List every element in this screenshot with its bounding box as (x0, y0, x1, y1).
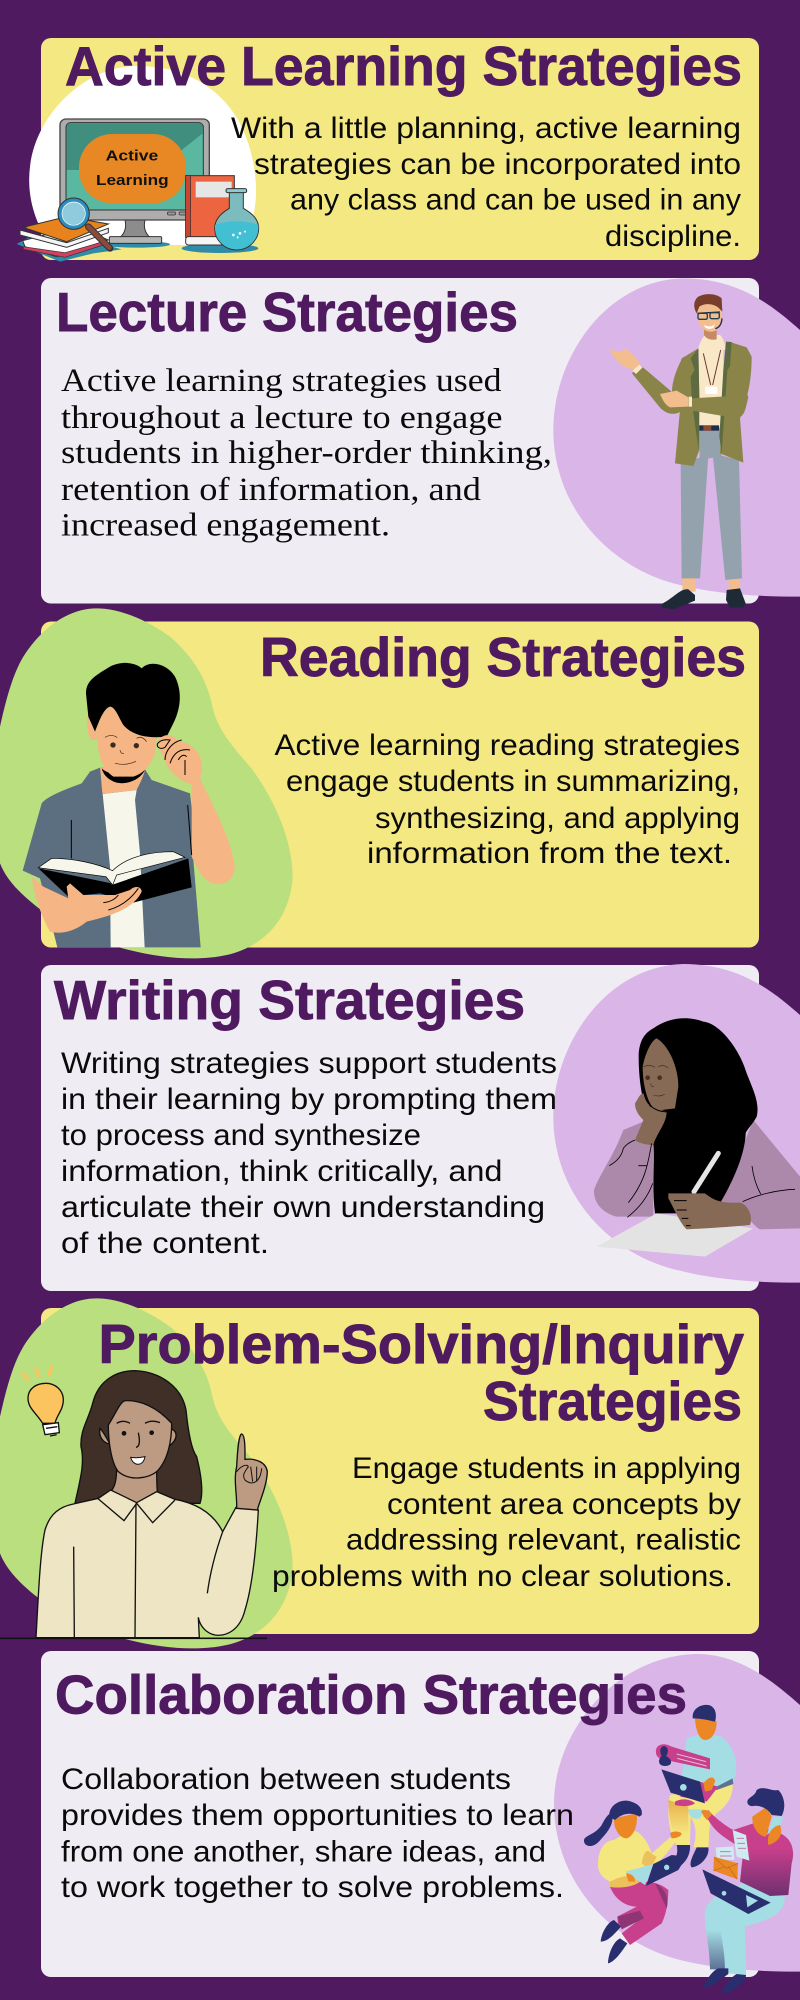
body text: of the content. (61, 1227, 269, 1260)
body text: to process and synthesize (61, 1119, 421, 1152)
body text: provides them opportunities to learn (61, 1799, 574, 1832)
panel: lecture strategies (41, 278, 800, 609)
body text: engage students in summarizing, (286, 765, 740, 798)
body text (61, 1047, 557, 1260)
body text: Active learning reading strategies (274, 729, 740, 762)
illustration: lecturer on purple blob (553, 278, 800, 609)
illustration: woman with idea on green blob (0, 1298, 293, 1648)
heading: Lecture Strategies (56, 281, 518, 343)
body text: content area concepts by (387, 1488, 741, 1521)
body text: synthesizing, and applying (375, 802, 740, 835)
heading (98, 1313, 744, 1432)
illustration: student reading on green blob (0, 608, 293, 958)
body text: information, think critically, and (61, 1155, 503, 1188)
body text: articulate their own understanding (61, 1191, 545, 1224)
desk line (0, 1638, 267, 1639)
body text: to work together to solve problems. (61, 1871, 564, 1904)
panel: problem-solving inquiry strategies (0, 1298, 759, 1648)
body text: increased engagement. (61, 508, 390, 544)
heading: Reading Strategies (260, 626, 746, 688)
illustration: student writing on purple blob (553, 964, 800, 1283)
body text: any class and can be used in any (290, 184, 741, 216)
panel: active learning strategies (17, 35, 759, 262)
body text: problems with no clear solutions. (272, 1560, 733, 1593)
heading: Strategies (483, 1370, 742, 1432)
heading: Collaboration Strategies (55, 1664, 687, 1726)
body text: discipline. (605, 220, 741, 253)
heading: Active Learning Strategies (65, 35, 742, 97)
person: top (656, 1705, 736, 1867)
body text (61, 1763, 574, 1904)
person: bottom left (584, 1801, 687, 1963)
body text: Writing strategies support students (61, 1047, 557, 1080)
body text: addressing relevant, realistic (346, 1524, 741, 1556)
heading: Problem-Solving/Inquiry (98, 1313, 744, 1375)
body text (272, 1452, 741, 1593)
body text (274, 729, 740, 870)
body text: Active learning strategies used (61, 363, 502, 399)
body text: strategies can be incorporated into (254, 148, 741, 181)
body text: from one another, share ideas, and (61, 1836, 546, 1868)
body text: With a little planning, active learning (231, 112, 741, 145)
heading: Writing Strategies (54, 969, 525, 1031)
body text: retention of information, and (61, 472, 482, 508)
body text (61, 363, 552, 544)
body text: Engage students in applying (352, 1452, 741, 1485)
body text: information from the text. (367, 837, 732, 870)
person: right (701, 1788, 793, 1993)
body text: throughout a lecture to engage (61, 400, 502, 436)
illustration: group of collaborating students on purple blob (554, 1654, 800, 1993)
body text (231, 112, 741, 253)
panel: reading strategies (0, 608, 759, 958)
monitor badge: active learning (79, 134, 186, 203)
panel: writing strategies (41, 964, 800, 1291)
body text: in their learning by prompting them (61, 1083, 557, 1116)
icon: light bulb (23, 1367, 63, 1436)
illustration: monitor, books and flask (17, 66, 259, 262)
body text: Collaboration between students (61, 1763, 511, 1796)
monitor badge: active learning: Active (106, 148, 158, 165)
panel: collaboration strategies (41, 1651, 800, 1993)
body text: students in higher-order thinking, (61, 435, 552, 471)
monitor badge: active learning: Learning (96, 172, 169, 189)
